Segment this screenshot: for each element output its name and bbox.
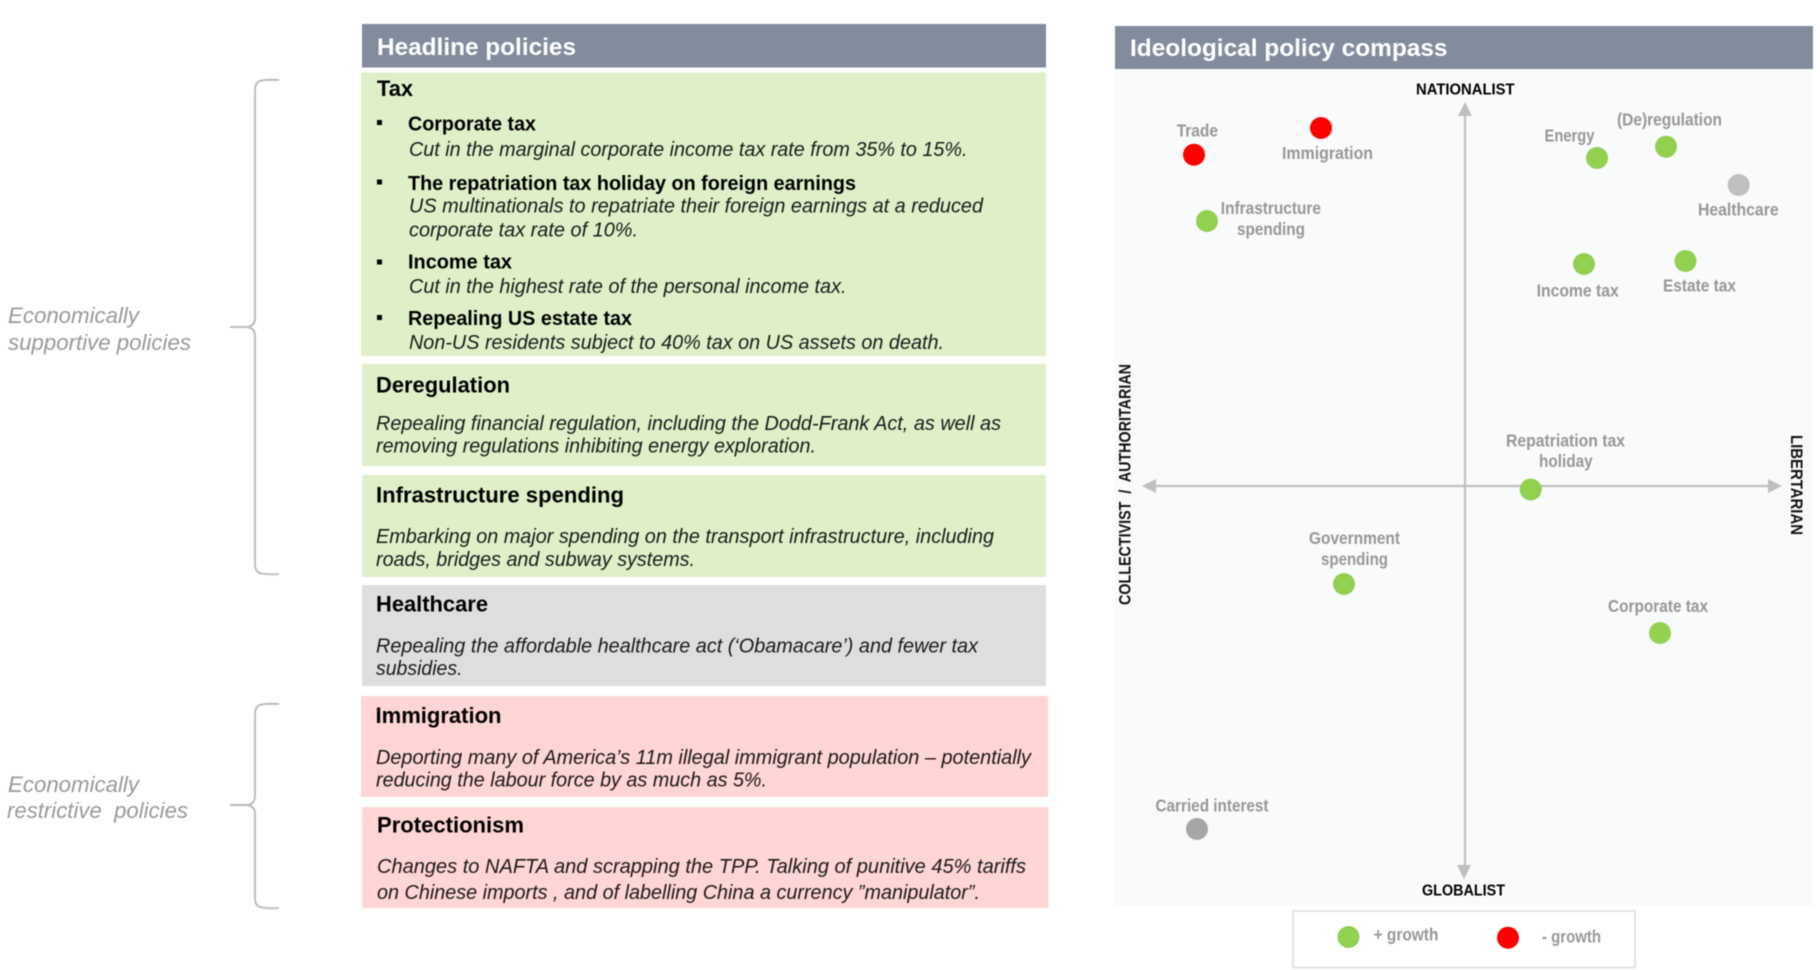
panel: tax: [361, 72, 1046, 356]
item: repatriation tax holiday: The repatriation tax holiday on foreign earnings: [408, 173, 856, 195]
panel: healthcare: Healthcare: [376, 592, 488, 617]
label: economically restrictive policies: [7, 772, 188, 823]
panel: healthcare: [362, 585, 1046, 686]
item: corporate tax: [377, 114, 968, 161]
panel: protectionism: on Chinese imports , and of labelling China a currency ”manipulator”.: [377, 882, 980, 904]
panel: immigration: [361, 696, 1048, 797]
panel: deregulation: removing regulations inhibiting energy exploration.: [376, 436, 816, 458]
point: carried interest: Carried interest: [1156, 796, 1269, 816]
point: infrastructure spending: spending: [1237, 219, 1305, 239]
item: corporate tax: Corporate tax: [408, 114, 536, 136]
point: healthcare: [1698, 174, 1779, 220]
item: income tax: [377, 252, 846, 298]
heading: tax: Tax: [377, 76, 413, 101]
label: economically supportive policies: Economically: [8, 303, 141, 328]
item: repatriation tax holiday: [377, 173, 984, 242]
label: economically restrictive policies: restrictive policies: [7, 798, 188, 823]
point: immigration: Immigration: [1282, 143, 1373, 163]
point: trade: Trade: [1177, 121, 1218, 141]
panel: infrastructure spending: roads, bridges and subway systems.: [376, 549, 695, 571]
vertical axis arrow: [1457, 102, 1472, 879]
item: repealing US estate tax: Non-US residents subject to 40% tax on US assets on death.: [409, 332, 944, 354]
point: repatriation tax holiday: [1506, 430, 1625, 500]
point: income tax: [1537, 253, 1619, 300]
point: healthcare: Healthcare: [1698, 200, 1779, 220]
heading: ideological policy compass: [1115, 26, 1813, 69]
bracket: supportive policies: [230, 80, 279, 574]
panel: infrastructure spending: Infrastructure spending: [376, 483, 624, 508]
axis label: nationalist: NATIONALIST: [1416, 82, 1515, 98]
panel: healthcare: subsidies.: [376, 658, 462, 680]
panel: protectionism: [362, 807, 1048, 908]
label: economically supportive policies: [8, 303, 191, 355]
item: corporate tax: Cut in the marginal corporate income tax rate from 35% to 15%.: [409, 139, 968, 161]
point: energy: [1544, 126, 1608, 169]
legend item: minus growth: - growth: [1542, 927, 1601, 947]
point: deregulation: (De)regulation: [1617, 110, 1722, 130]
legend item: minus growth: [1497, 927, 1601, 949]
point: deregulation: [1617, 110, 1722, 158]
point: government spending: Government: [1309, 528, 1400, 548]
item: income tax: Income tax: [408, 252, 512, 274]
panel: immigration: Deporting many of America’s 11m illegal immigrant population – potentially: [376, 747, 1032, 769]
heading: headline policies: Headline policies: [377, 34, 576, 61]
point: estate tax: [1663, 250, 1736, 296]
item: repatriation tax holiday: US multinationals to repatriate their foreign earnings at a reduced: [409, 196, 984, 218]
panel: deregulation: Deregulation: [376, 373, 510, 398]
bracket: restrictive policies: [230, 704, 279, 908]
label: economically restrictive policies: Economically: [8, 772, 141, 797]
axis label: globalist: GLOBALIST: [1422, 883, 1505, 900]
legend: [1293, 911, 1635, 968]
label: economically supportive policies: supportive policies: [8, 330, 191, 355]
point: repatriation tax holiday: holiday: [1539, 451, 1593, 471]
panel: immigration: Immigration: [376, 703, 502, 728]
point: corporate tax: Corporate tax: [1608, 596, 1708, 616]
point: infrastructure spending: Infrastructure: [1221, 198, 1321, 218]
panel: immigration: reducing the labour force by as much as 5%.: [376, 770, 767, 792]
point: energy: Energy: [1544, 126, 1595, 146]
item: income tax: Cut in the highest rate of the personal income tax.: [409, 276, 846, 298]
panel: protectionism: Changes to NAFTA and scrapping the TPP. Talking of punitive 45% tariffs: [377, 856, 1026, 878]
panel: infrastructure spending: [362, 475, 1046, 577]
point: government spending: [1309, 528, 1400, 595]
point: infrastructure spending: [1196, 198, 1321, 239]
point: estate tax: Estate tax: [1663, 276, 1736, 296]
heading: headline policies: [362, 24, 1046, 68]
legend item: plus growth: + growth: [1374, 925, 1438, 945]
item: repealing US estate tax: Repealing US estate tax: [408, 308, 632, 330]
chart: policy compass: [1115, 69, 1812, 906]
point: carried interest: [1156, 796, 1269, 840]
point: immigration: [1282, 117, 1373, 163]
panel: deregulation: [362, 364, 1046, 466]
horizontal axis arrow: [1142, 479, 1782, 493]
point: trade: [1177, 121, 1218, 166]
axis label: collectivist / authoritarian: COLLECTIVIST / AUTHORITARIAN: [1116, 364, 1134, 605]
panel: infrastructure spending: Embarking on major spending on the transport infrastructure, including: [376, 526, 994, 548]
point: government spending: spending: [1321, 549, 1388, 569]
item: repealing US estate tax: [377, 308, 944, 354]
panel: healthcare: Repealing the affordable healthcare act (‘Obamacare’) and fewer tax: [376, 636, 979, 658]
point: repatriation tax holiday: Repatriation tax: [1506, 430, 1625, 450]
panel: protectionism: Protectionism: [377, 813, 524, 838]
point: corporate tax: [1608, 596, 1708, 644]
axis label: libertarian: LIBERTARIAN: [1787, 435, 1806, 535]
panel: deregulation: Repealing financial regulation, including the Dodd-Frank Act, as well as: [376, 413, 1001, 435]
point: income tax: Income tax: [1537, 280, 1619, 300]
legend item: plus growth: [1338, 925, 1438, 948]
item: repatriation tax holiday: corporate tax rate of 10%.: [409, 220, 638, 242]
heading: ideological policy compass: Ideological policy compass: [1130, 35, 1448, 62]
